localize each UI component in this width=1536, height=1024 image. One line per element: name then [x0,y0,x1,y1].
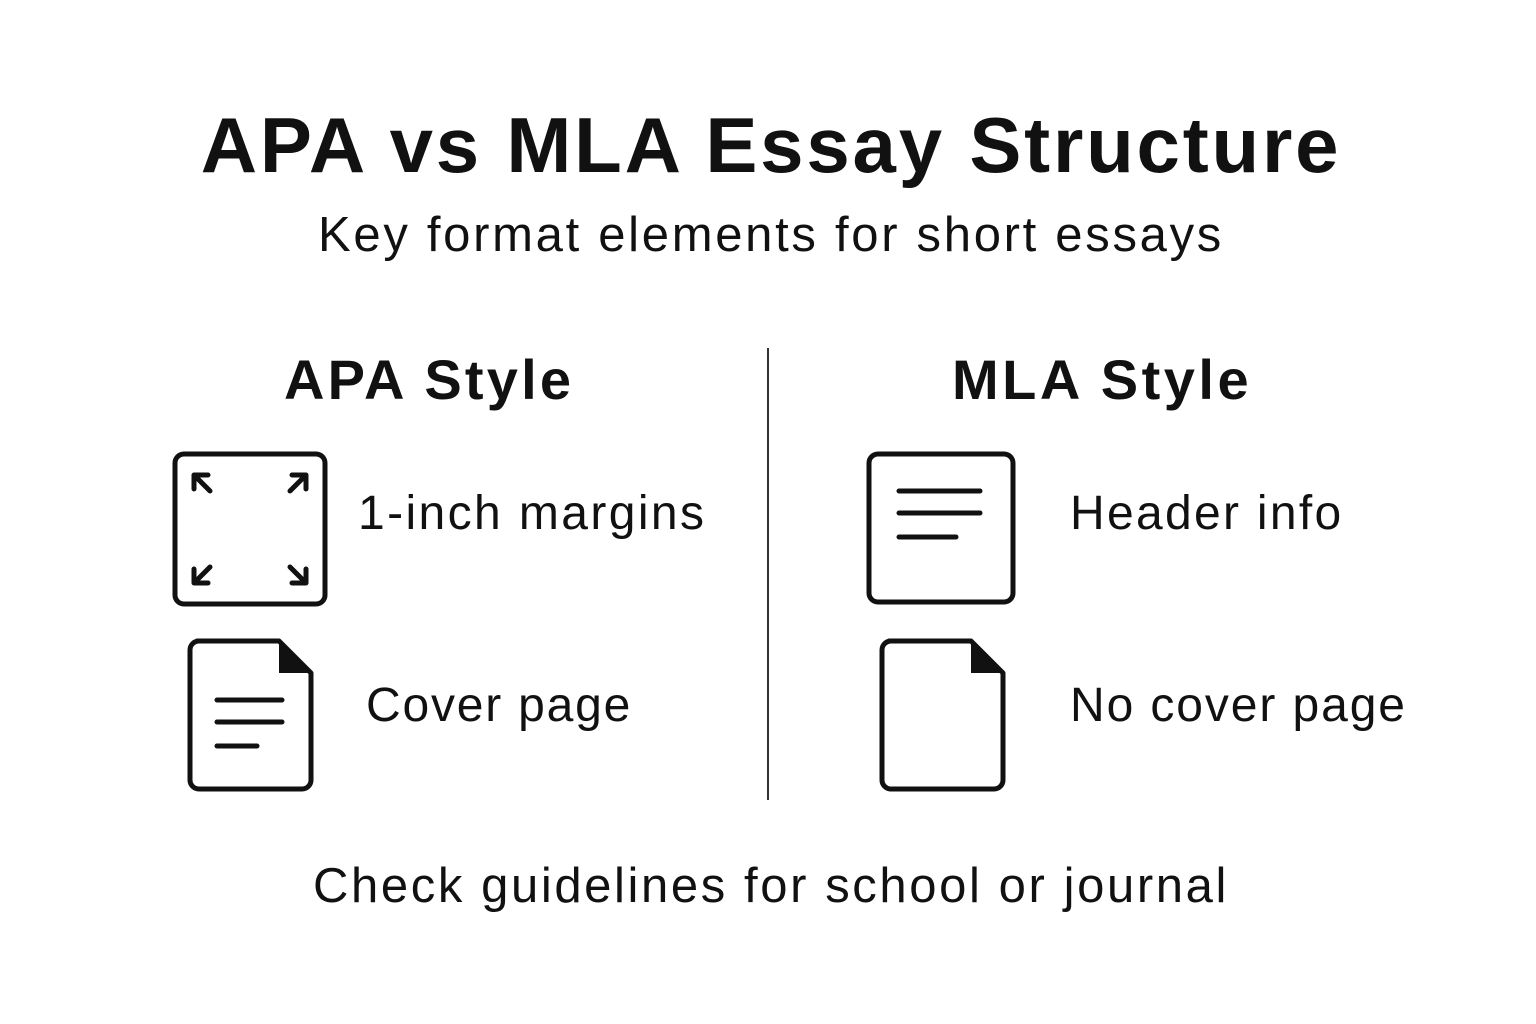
panel: MLA [866,348,1407,792]
footer note: Check guidelines for school or journal [313,859,1229,913]
title: APA vs MLA Essay Structure [201,101,1341,189]
panel: APA [172,348,706,792]
label: No cover page: No cover page [1070,679,1407,732]
icon: blank document [880,638,1006,792]
heading: MLA Style: MLA Style [952,348,1252,411]
subtitle: Key format elements for short essays [318,208,1224,262]
label: Cover page: Cover page [366,679,632,732]
icon: cover page document [188,638,314,792]
label: Header info: Header info [1070,487,1343,540]
icon: margins [172,452,328,606]
divider [767,348,769,800]
label: 1-inch margins: 1-inch margins [358,487,706,540]
heading: APA Style: APA Style [284,348,574,411]
icon: header info [866,452,1016,604]
